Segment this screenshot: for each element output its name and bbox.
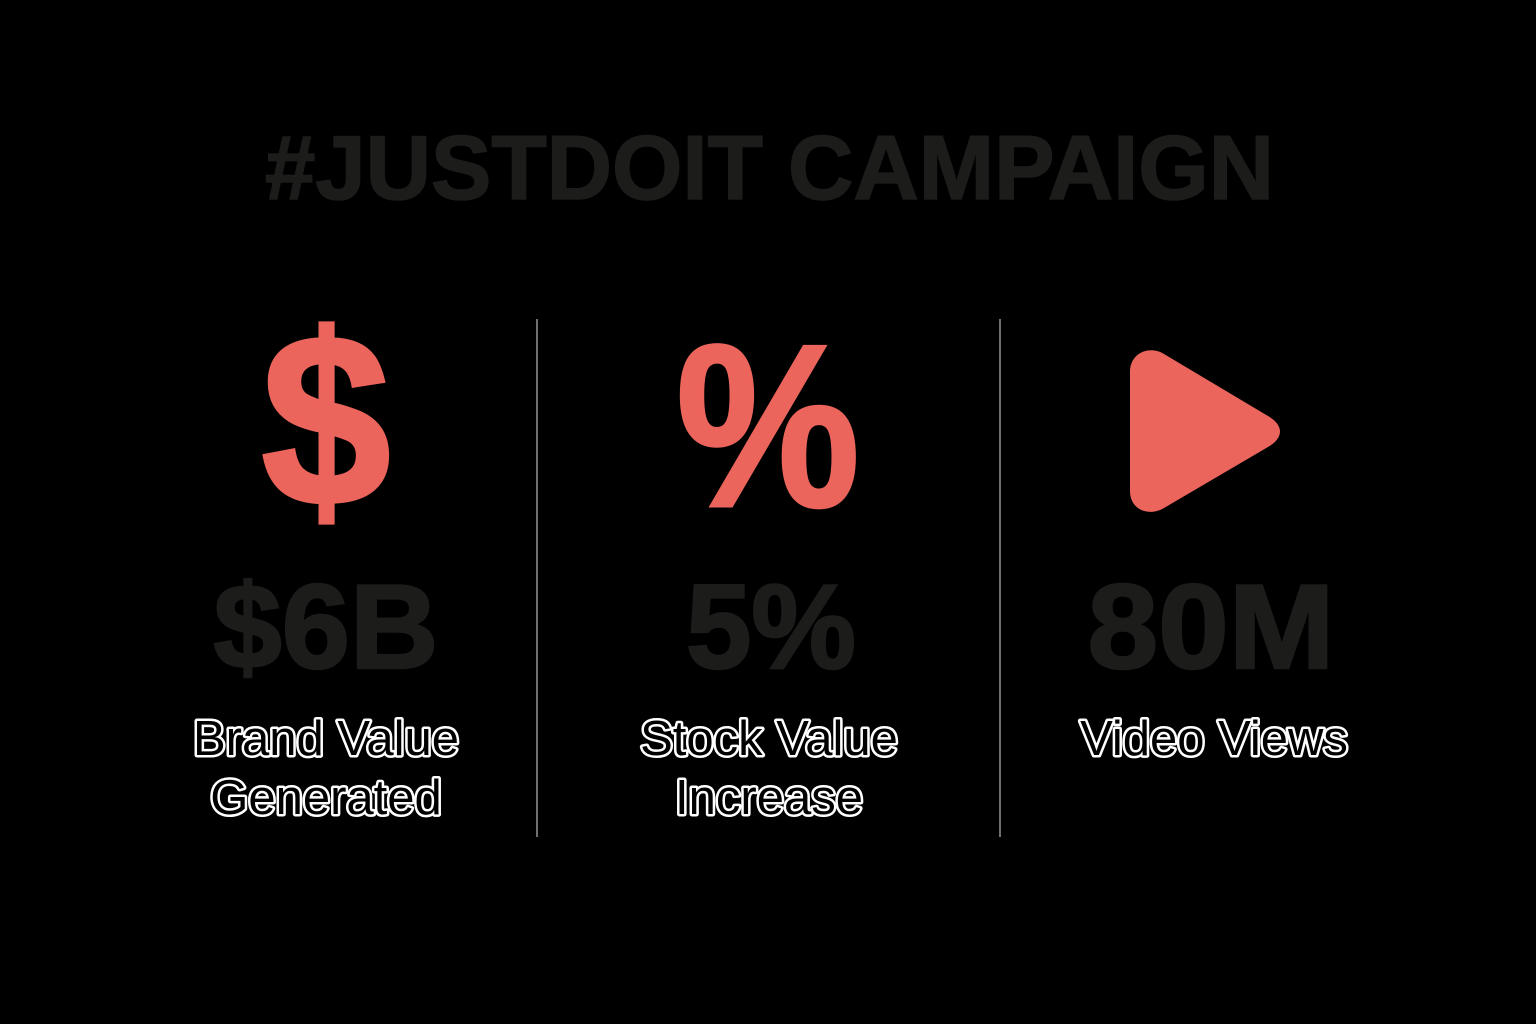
panel: brand value [193,284,459,825]
title: #JUSTDOIT CAMPAIGN [265,118,1274,219]
divider [999,319,1001,837]
icon: percent sign: % [676,297,860,556]
label: Brand Value Generated [193,712,459,825]
label: Brand Value Generated: Generated [210,771,442,825]
stat: $6B: $6B [214,560,438,694]
label: Stock Value Increase: Stock Value [640,712,898,766]
label: Stock Value Increase [640,712,898,825]
label: Video Views: Video Views [1080,712,1348,766]
stat: 5%: 5% [686,560,856,694]
stat: 80M: 80M [1088,560,1334,694]
icon: dollar sign: $ [262,284,390,556]
label: Stock Value Increase: Increase [675,771,863,825]
divider [536,319,538,837]
icon: play triangle [1130,350,1280,512]
panel: stock value [640,297,898,825]
label: Brand Value Generated: Brand Value [193,712,459,766]
panel: video views [1080,350,1348,766]
